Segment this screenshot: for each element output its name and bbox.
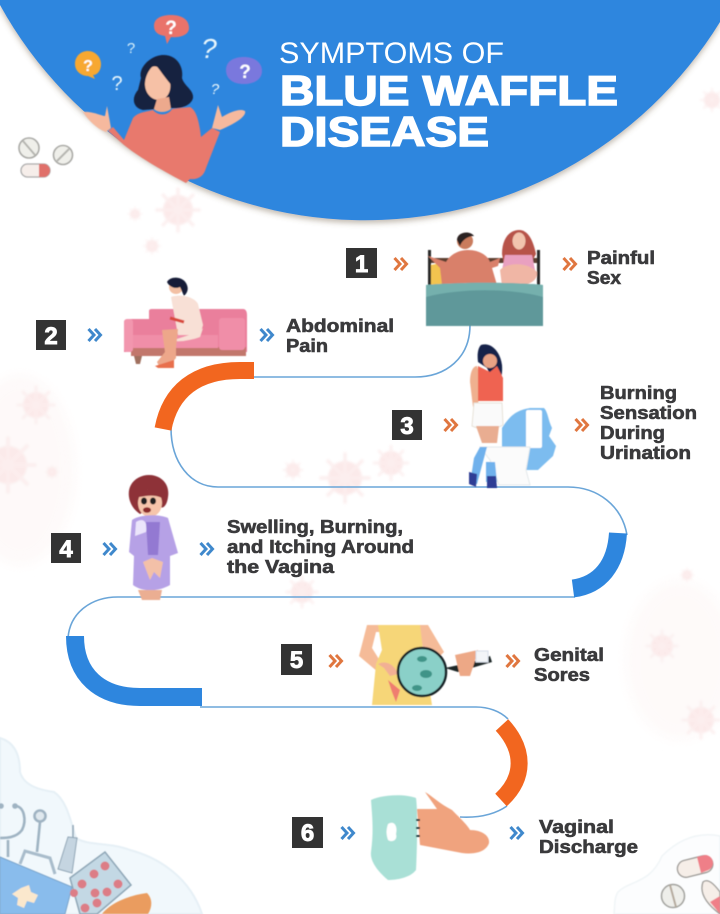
neck and face [145, 66, 170, 100]
illustration: couple in bed [426, 230, 543, 326]
label: Sensation [600, 403, 697, 423]
chevron [576, 419, 588, 431]
chevron [506, 655, 518, 667]
label [587, 248, 655, 288]
step 4: swelling, burning, itching [51, 475, 414, 600]
label: and Itching Around [227, 537, 414, 557]
title: SYMPTOMS OF [279, 37, 504, 70]
hands [83, 106, 111, 132]
small question marks: ? [127, 40, 135, 57]
label: Sex [587, 268, 621, 288]
label [286, 316, 394, 356]
number badge 3 [392, 410, 422, 440]
chevron [394, 258, 406, 270]
path segment: blue arc right [573, 533, 618, 588]
label [534, 645, 604, 685]
label [600, 383, 697, 463]
chevron [200, 543, 212, 555]
cross [12, 885, 38, 908]
bubble: purple question [226, 57, 262, 84]
step 3: burning sensation [392, 344, 697, 488]
number badge 1 [346, 248, 377, 278]
number badge 2 [36, 320, 66, 350]
illustration: woman in robe [129, 475, 178, 600]
label [227, 517, 414, 577]
syringe [58, 837, 77, 873]
step 6: vaginal discharge [292, 792, 638, 880]
icon: medical kit, stethoscope, syringe and blister pack [0, 804, 151, 914]
sweater [108, 107, 220, 183]
label: Swelling, Burning, [227, 517, 403, 537]
illustration: woman on sofa [124, 278, 247, 368]
bubble: orange question: ? [83, 58, 93, 75]
chevron [564, 258, 576, 270]
number badge 2: 2 [44, 323, 58, 350]
number badge 6 [292, 817, 323, 848]
title [279, 37, 618, 155]
decorative blob bottom left [0, 738, 202, 914]
label: Discharge [539, 837, 638, 857]
icon: pills bottom right [662, 854, 720, 914]
illustration: confused woman with question bubbles [75, 15, 262, 183]
chevron [330, 655, 342, 667]
path segment: blue arc left [75, 636, 202, 697]
illustration: woman and toilet [469, 344, 556, 488]
small question marks: ? [211, 81, 220, 98]
hair back [134, 55, 193, 110]
number badge 6: 6 [301, 820, 314, 847]
bubble: salmon question [154, 15, 189, 44]
number badge 3: 3 [400, 413, 414, 440]
label [539, 817, 638, 857]
number badge 4: 4 [59, 536, 73, 563]
chevron [510, 827, 522, 839]
label: Burning [600, 383, 677, 403]
chevron [88, 329, 100, 341]
path segment: orange arc lower right [501, 725, 519, 800]
winding path line [68, 325, 627, 817]
background virus pattern [0, 88, 720, 740]
header banner [0, 0, 720, 220]
title: DISEASE [280, 108, 489, 155]
illustration: hand with sanitary pad [371, 792, 489, 880]
title: BLUE WAFFLE [280, 67, 618, 114]
number badge 5: 5 [290, 647, 303, 674]
bed [426, 283, 543, 326]
label: the Vagina [227, 557, 335, 577]
chevron [342, 827, 354, 839]
chevron [260, 329, 272, 341]
bubble: orange question [75, 51, 101, 79]
label: Sores [534, 665, 590, 685]
step 1: painful sex [346, 230, 655, 326]
stethoscope [0, 804, 46, 857]
chevron [104, 543, 116, 555]
bandage [102, 893, 151, 914]
number badge 1: 1 [355, 251, 368, 278]
path segment: orange arc upper left [163, 370, 254, 429]
blister [70, 852, 131, 914]
bubble: salmon question: ? [165, 18, 177, 39]
icon: pills top left [19, 138, 72, 177]
label: Genital [534, 645, 604, 665]
label: Vaginal [539, 817, 614, 837]
step 5: genital sores [281, 625, 604, 705]
chevron [444, 419, 456, 431]
kit body [0, 857, 72, 914]
label: Pain [286, 336, 328, 356]
number badge 5 [281, 644, 312, 675]
bubble: purple question: ? [239, 62, 251, 83]
label: Urination [600, 443, 691, 463]
decorative blob bottom right [614, 835, 720, 914]
label: Abdominal [286, 316, 394, 336]
small question marks: ? [111, 73, 123, 95]
woman [171, 296, 203, 335]
small question marks: ? [201, 33, 217, 64]
kit handle [20, 851, 55, 874]
small question marks [111, 33, 220, 98]
number badge 4 [51, 533, 81, 563]
step 2: abdominal pain [36, 278, 394, 368]
illustration: torso with magnifier [359, 625, 492, 705]
label: Painful [587, 248, 655, 268]
label: During [600, 423, 665, 443]
